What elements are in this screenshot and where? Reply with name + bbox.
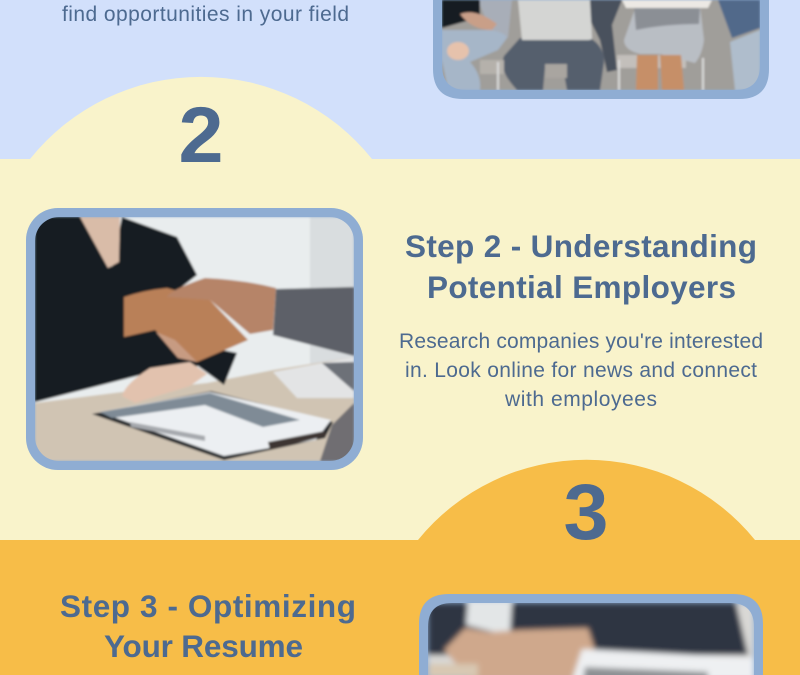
desk: [35, 357, 354, 461]
right person: [718, 0, 760, 38]
step 1 closing text: find opportunities in your field: [62, 3, 349, 26]
section 3 background with dome: [0, 460, 800, 675]
clipboard: [92, 391, 333, 460]
number 3: 3: [564, 467, 608, 556]
laptop: [273, 357, 354, 398]
step 3 photo frame: [419, 594, 763, 675]
woman hand on desk: [122, 362, 207, 403]
section 2 background with dome: [0, 77, 800, 540]
step 3 heading: Your Resume: [104, 628, 303, 664]
centre person trousers: [503, 38, 604, 90]
skirt: [624, 6, 704, 63]
step 2 heading: Potential Employers: [427, 269, 736, 305]
step 2 body text: in. Look online for news and connect: [405, 359, 757, 382]
number 2: 2: [178, 90, 224, 179]
step 2 body text: Research companies you're interested: [399, 330, 763, 353]
man at lower right: [320, 403, 354, 461]
chair seats: [480, 60, 504, 74]
woman arm and hand: [124, 288, 248, 362]
step 3 heading: [60, 588, 356, 664]
step 2 heading: [405, 228, 757, 305]
step 3 heading: Step 3 - Optimizing: [60, 588, 356, 624]
centre person jacket: [590, 0, 622, 72]
laptop: [518, 0, 592, 40]
section 1 background: [0, 0, 800, 160]
step 2 photo frame: [26, 208, 363, 470]
step 1 photo frame: [433, 0, 769, 99]
jacket: [35, 217, 237, 402]
step 2 body text: with employees: [504, 388, 657, 411]
neck: [80, 217, 120, 268]
step 2 heading: Step 2 - Understanding: [405, 228, 757, 264]
legs: [636, 55, 658, 90]
man hand: [167, 278, 276, 334]
left person jacket and tablet: [478, 0, 512, 38]
step 2 body text: [399, 330, 763, 411]
man sleeve: [273, 287, 354, 356]
